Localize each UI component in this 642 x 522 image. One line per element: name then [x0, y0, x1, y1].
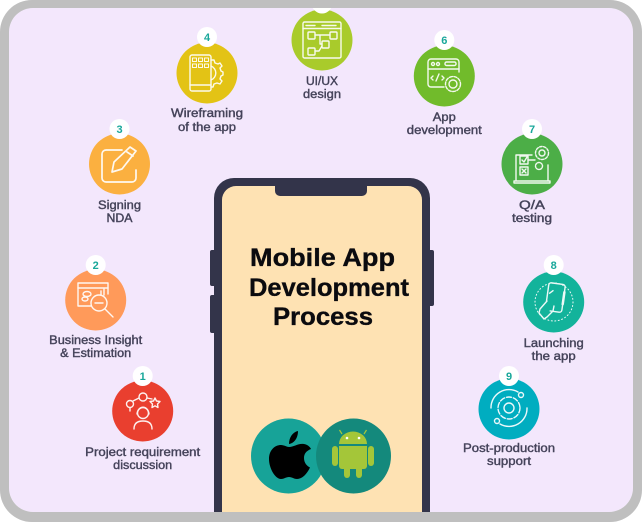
step 4: wireframing of the app: 4	[204, 32, 211, 44]
step 2: business insight and estimation	[49, 255, 143, 360]
step 7: Q/A testing	[502, 119, 562, 225]
label: discussion	[113, 460, 172, 472]
label	[407, 112, 483, 137]
step 5: UI/UX design	[292, 0, 352, 101]
title: Mobile App	[250, 244, 395, 272]
label	[303, 76, 341, 101]
step 8: launching the app: 8	[551, 260, 557, 272]
phone side buttons	[210, 250, 434, 333]
label: support	[487, 456, 532, 468]
step 1: project requirement discussion: 1	[140, 371, 146, 383]
label: UI/UX	[306, 76, 338, 88]
step 9: post-production support: 9	[506, 371, 512, 383]
step 9: post-production support	[463, 366, 555, 468]
label: App	[433, 112, 456, 124]
icon: wireframe flow window	[303, 22, 341, 58]
icon: hand holding phone	[535, 283, 573, 321]
phone screen	[222, 186, 422, 512]
label: Launching	[524, 338, 584, 350]
label: Project requirement	[85, 447, 201, 459]
phone illustration	[210, 178, 434, 512]
label	[85, 447, 201, 472]
label: Business Insight	[49, 335, 143, 347]
icon: phone wireframe with gear	[190, 55, 223, 91]
icon: code window and gear	[428, 59, 460, 92]
step 1: project requirement discussion	[85, 366, 201, 472]
step 4: wireframing of the app	[171, 27, 243, 134]
label: & Estimation	[60, 348, 131, 360]
step 6: app development	[407, 30, 483, 137]
label	[49, 335, 143, 360]
label	[524, 338, 584, 363]
icon: apple	[251, 418, 326, 494]
label: Q/A	[519, 200, 545, 212]
title: Process	[273, 303, 373, 331]
label: NDA	[106, 213, 133, 225]
icon: magnifier on chart	[78, 283, 113, 317]
icon: pencil on square	[102, 147, 136, 182]
title: Development	[249, 274, 410, 302]
step 2: business insight and estimation: 2	[93, 260, 99, 272]
title	[249, 244, 410, 331]
label: development	[407, 125, 483, 137]
label: testing	[512, 213, 552, 225]
icon: android	[316, 418, 391, 494]
label	[512, 200, 552, 225]
step 3: signing NDA	[89, 119, 150, 225]
label: Wireframing	[171, 108, 243, 120]
step 6: app development: 6	[441, 35, 447, 47]
label: Post-production	[463, 443, 555, 455]
label	[98, 200, 141, 225]
step 8: launching the app	[523, 255, 584, 363]
label: the app	[532, 351, 576, 363]
phone body	[214, 178, 430, 512]
label	[171, 108, 243, 134]
icon: gear with orbit	[491, 390, 527, 426]
icon: person with ideas	[126, 393, 160, 429]
icon: test laptop and gears	[514, 146, 550, 183]
label: of the app	[178, 122, 236, 134]
step 3: signing NDA: 3	[116, 124, 123, 136]
label	[463, 443, 555, 468]
label: Signing	[98, 200, 141, 212]
step 7: Q/A testing: 7	[529, 124, 535, 136]
label: design	[303, 89, 341, 101]
